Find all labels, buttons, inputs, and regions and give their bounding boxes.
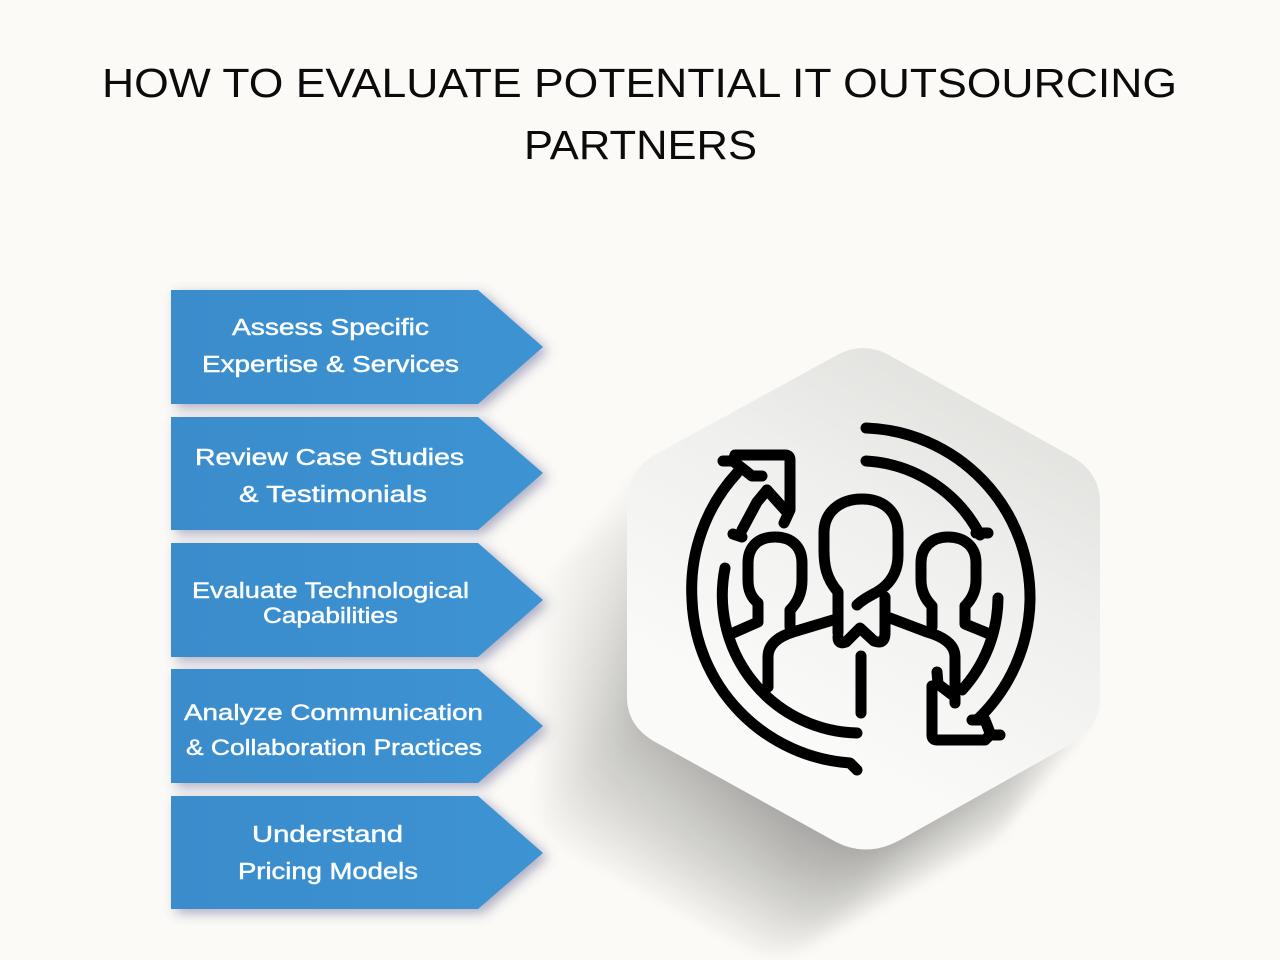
hexagon panel [627,348,1100,850]
icon: team in circular arrows [692,428,1030,770]
arrow 4: communication [171,669,543,783]
arrow 2: case studies [171,417,543,530]
title: PARTNERS [524,122,757,168]
arrow 2: case studies: Review Case Studies [195,444,464,470]
icon: shoulders [768,618,955,693]
arrow 3: technological capabilities: Evaluate Technological [192,578,469,603]
arrow 5: pricing models: Pricing Models [238,858,418,884]
arrow 3: technological capabilities: Capabilities [263,603,398,628]
arrow 4: communication: & Collaboration Practices [186,735,482,760]
icon: outer and inner cycle arcs [692,428,1030,770]
title: HOW TO EVALUATE POTENTIAL IT OUTSOURCING [102,60,1177,106]
icon: left person [733,537,802,633]
icon: right person [921,537,987,633]
arrow 1: assess expertise: Assess Specific [232,314,429,340]
arrow 1: assess expertise [171,290,543,404]
icon: lower-right arrow head [932,672,1000,740]
arrow 4: communication: Analyze Communication [184,700,483,725]
arrow 5: pricing models [171,796,543,909]
icon: centre person [824,499,898,713]
arrow 2: case studies: & Testimonials [239,481,427,507]
arrow 1: assess expertise: Expertise & Services [202,351,459,377]
hexagon long shadow [548,509,1074,950]
arrow 5: pricing models: Understand [252,821,403,847]
arrow 3: technological capabilities [171,543,543,657]
title [102,60,1177,168]
icon: upper-left arrow head [723,455,790,530]
